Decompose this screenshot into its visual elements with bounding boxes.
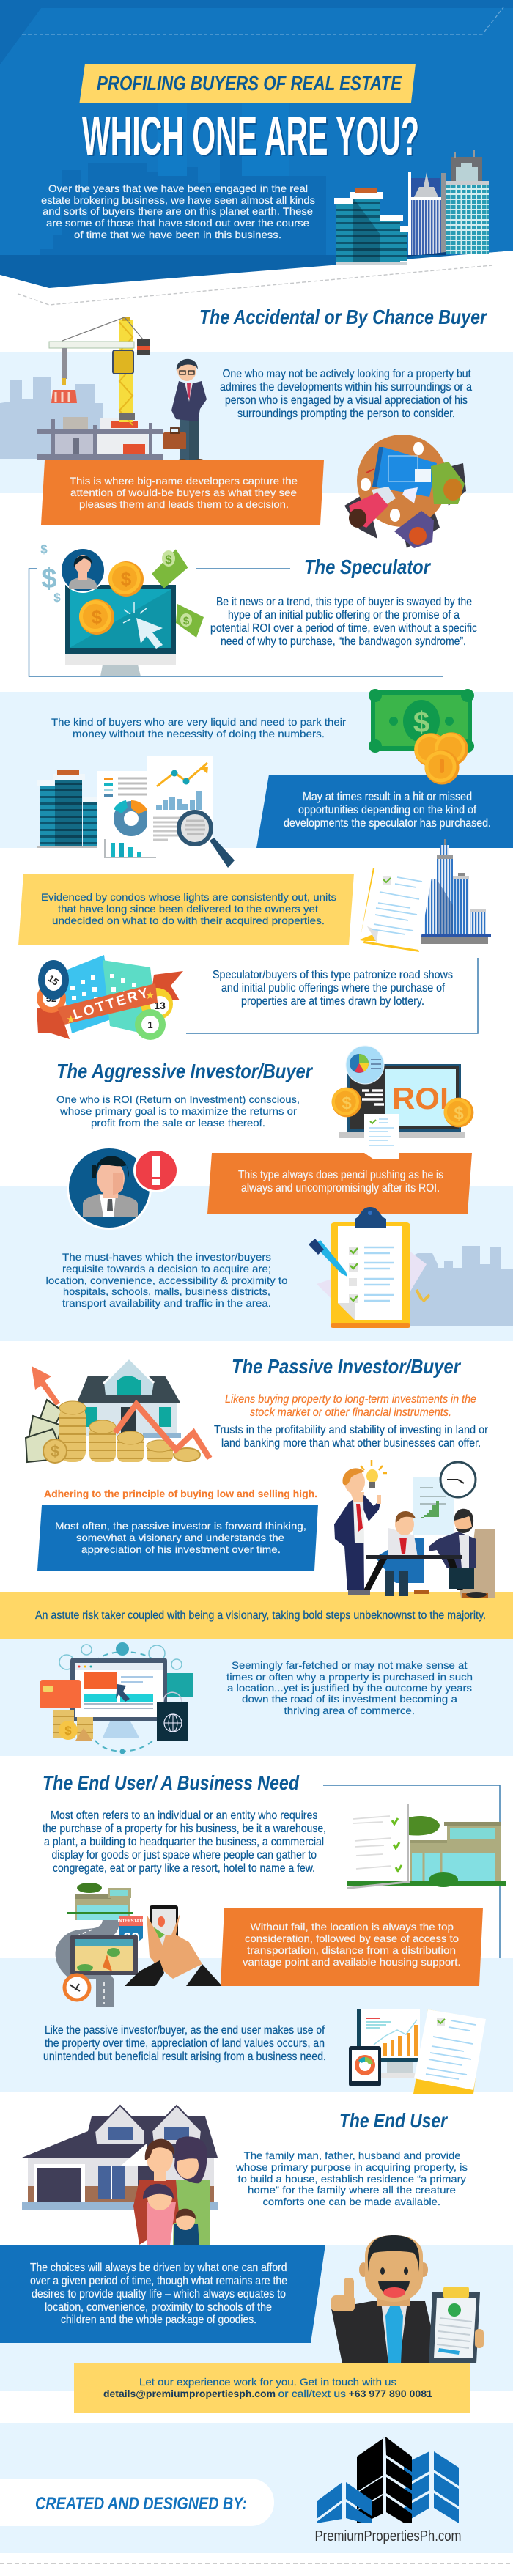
body text: profit from the sale or lease thereof. bbox=[91, 1117, 265, 1129]
illustration: map, road and phone: INTERSTATE bbox=[118, 1919, 144, 1924]
orange highlight text: Likens buying property to long-term investments in the bbox=[225, 1393, 476, 1406]
illustration: ROI laptop: $ bbox=[454, 1104, 464, 1123]
intro text: Over the years that we have been engaged in the real bbox=[48, 182, 308, 194]
body text: One who is ROI (Return on Investment) conscious, bbox=[56, 1093, 300, 1105]
intro text: are some of those that have stood out over the course bbox=[46, 217, 309, 229]
text: far-fetched: down the road of its investment becoming a bbox=[242, 1693, 457, 1705]
section: passive investor bbox=[0, 1355, 513, 1756]
body text bbox=[235, 2149, 468, 2207]
illustration: e-commerce: $ bbox=[64, 1724, 72, 1738]
header panel bbox=[0, 0, 513, 288]
text: like the passive investor: unintended but beneficial result arising from a business need. bbox=[43, 2051, 326, 2063]
logo bbox=[315, 2437, 462, 2544]
text: liquid buyers bbox=[51, 716, 346, 739]
section: end user business need bbox=[0, 1771, 513, 2094]
text: like the passive investor: the property over time, appreciation of land values occurs, an bbox=[45, 2037, 325, 2050]
orange callout: Without fail, the location is always the top bbox=[251, 1921, 454, 1933]
band bbox=[0, 2245, 513, 2391]
orange callout bbox=[41, 460, 324, 525]
contact box: or call/text us bbox=[278, 2388, 346, 2399]
blue callout bbox=[0, 2245, 325, 2343]
title banner bbox=[79, 64, 416, 103]
blue callout: children and the whole package of goodies. bbox=[61, 2314, 256, 2326]
dashed road line bbox=[16, 265, 492, 305]
illustration: monitor tablet and document bbox=[349, 2009, 486, 2094]
illustration: lottery tickets: 52 bbox=[46, 993, 56, 1004]
dashed footer line bbox=[0, 2563, 513, 2564]
body text bbox=[214, 1424, 489, 1450]
intro text: and sorts of buyers there are on this planet earth. These bbox=[43, 205, 313, 217]
contact box: +63 977 890 0081 bbox=[349, 2388, 432, 2399]
orange highlight text bbox=[225, 1393, 476, 1419]
text: far-fetched: thriving area of commerce. bbox=[284, 1705, 415, 1716]
logo: PremiumPropertiesPh.com bbox=[315, 2528, 462, 2544]
body text: whose primary purpose in acquiring property, is bbox=[235, 2161, 468, 2173]
intro text: estate brokering business, we have seen almost all kinds bbox=[41, 194, 315, 206]
heading: The Passive Investor/Buyer bbox=[232, 1355, 462, 1378]
body text: congregate, eat or party like a resort, hotel to name a few. bbox=[53, 1862, 315, 1875]
illustration: skyscraper and contract bbox=[360, 839, 491, 952]
blue callout: May at times result in a hit or missed bbox=[303, 791, 472, 803]
blue callout: location, convenience, proximity to schools of the bbox=[45, 2301, 272, 2314]
section: accidental buyer bbox=[0, 306, 513, 548]
body text bbox=[210, 596, 477, 648]
illustration: lottery tickets: 1 bbox=[147, 1019, 153, 1030]
illustration: monitor with coins and cursor bbox=[40, 542, 204, 676]
illustration: ROI laptop bbox=[332, 1046, 473, 1159]
illustration: monitor with coins and cursor: $ bbox=[165, 553, 172, 567]
illustration: e-commerce bbox=[40, 1642, 193, 1754]
section: the end user bbox=[0, 2106, 513, 2413]
illustration: towers and charts with magnifier bbox=[37, 756, 235, 868]
text: road shows: properties are at times drawn by lottery. bbox=[241, 995, 424, 1008]
yellow callout: undecided on what to do with their acquired properties. bbox=[52, 915, 325, 926]
body text: potential ROI over a period of time, even without a specific bbox=[210, 622, 477, 635]
body text: need of why to purchase, “the bandwagon syndrome”. bbox=[221, 635, 466, 648]
illustration: monitor with coins and cursor: $ bbox=[183, 615, 190, 627]
blue callout: developments the speculator has purchased. bbox=[284, 817, 491, 830]
body text: to build a house, establish residence “a primary bbox=[237, 2173, 466, 2185]
text: must-haves bbox=[45, 1251, 288, 1309]
illustration: lottery tickets: ★ bbox=[66, 1014, 75, 1026]
heading: The End User bbox=[339, 2109, 449, 2132]
illustration: banknote and coins bbox=[369, 689, 474, 785]
orange callout: This type always does pencil pushing as he is bbox=[238, 1169, 443, 1181]
band bbox=[0, 1592, 513, 1639]
illustration: lottery tickets bbox=[37, 955, 183, 1040]
footer panel bbox=[0, 2423, 513, 2553]
illustration: business meeting bbox=[334, 1460, 495, 1598]
blue callout: desires to provide quality life – which always equates to bbox=[32, 2288, 286, 2300]
illustration: monitor with coins and cursor: $ bbox=[53, 591, 61, 605]
text: far-fetched bbox=[226, 1659, 473, 1716]
illustration: ROI laptop: $ bbox=[342, 1093, 352, 1113]
heading: The End User/ A Business Need bbox=[43, 1771, 300, 1794]
body text: admires the developments within his surroundings or a bbox=[220, 381, 472, 394]
orange callout: pleases them and leads them to a decision. bbox=[79, 498, 289, 510]
body text: land banking more than what other businesses can offer. bbox=[221, 1437, 481, 1450]
blue callout: Most often, the passive investor is forward thinking, bbox=[55, 1520, 306, 1532]
heading: The Aggressive Investor/Buyer bbox=[56, 1060, 314, 1082]
orange callout: consideration, followed by ease of access to bbox=[245, 1933, 459, 1944]
icon: investor avatar with alert bbox=[67, 1146, 179, 1230]
illustration: house coins and falling arrow: $ bbox=[51, 1442, 59, 1461]
yellow callout: that have long since been delivered to the owners yet bbox=[58, 903, 318, 915]
body text: the purchase of a property for his business, be it a warehouse, bbox=[43, 1823, 326, 1835]
body text: Trusts in the profitability and stability of investing in land or bbox=[214, 1424, 489, 1436]
text: far-fetched: a location...yet is justified by the outcome by years bbox=[227, 1682, 472, 1694]
illustration: map, road and phone bbox=[56, 1883, 222, 2007]
illustration: ROI laptop: ROI bbox=[392, 1081, 449, 1115]
body text: whose primary goal is to maximize the returns or bbox=[59, 1105, 297, 1117]
blue callout: over a given period of time, though what remains are the bbox=[30, 2275, 287, 2287]
yellow callout bbox=[18, 874, 354, 945]
band bbox=[0, 1186, 513, 1341]
blue callout bbox=[256, 775, 513, 848]
text: liquid buyers: The kind of buyers who are very liquid and need to park their bbox=[51, 716, 346, 728]
illustration: construction site and crane bbox=[0, 317, 163, 460]
frame line bbox=[186, 958, 478, 1033]
body text: home” for the family where all the creature bbox=[248, 2184, 456, 2196]
blue callout: The choices will always be driven by what one can afford bbox=[30, 2262, 287, 2274]
illustration: monitor with coins and cursor: $ bbox=[41, 564, 57, 594]
body text: The family man, father, husband and provide bbox=[244, 2149, 461, 2161]
blue callout: appreciation of his investment over time. bbox=[81, 1543, 281, 1555]
blue callout: somewhat a visionary and understands the bbox=[76, 1532, 284, 1543]
orange callout: always and uncompromisingly after its ROI. bbox=[241, 1182, 440, 1195]
blue callout bbox=[37, 1505, 318, 1571]
illustration: banknote and coins: $ bbox=[413, 706, 429, 739]
contact box: Let our experience work for you. Get in touch with us bbox=[139, 2376, 396, 2388]
band bbox=[0, 1958, 513, 2092]
blue callout: opportunities depending on the kind of bbox=[298, 804, 476, 816]
text: road shows: Speculator/buyers of this type patronize road shows bbox=[213, 969, 453, 981]
orange callout: vantage point and available housing support. bbox=[243, 1956, 461, 1968]
heading: The Speculator bbox=[304, 556, 432, 578]
illustration: commercial building and checklist bbox=[347, 1804, 506, 1889]
text: liquid buyers: money without the necessity of doing the numbers. bbox=[73, 728, 325, 739]
credit pill bbox=[0, 2479, 274, 2526]
body text: Be it news or a trend, this type of buyer is swayed by the bbox=[216, 596, 472, 608]
body text: surroundings prompting the person to consider. bbox=[237, 407, 455, 420]
body text: Most often refers to an individual or an entity who requires bbox=[51, 1809, 318, 1822]
body text: a plant, a building to headquarter the business, a commercial bbox=[44, 1836, 324, 1848]
illustration: checklist clipboard with city bbox=[309, 1207, 513, 1328]
body text: comforts one can be made available. bbox=[262, 2196, 440, 2207]
credit pill: CREATED AND DESIGNED BY: bbox=[35, 2494, 247, 2514]
heading rule bbox=[196, 568, 290, 569]
section: the speculator bbox=[0, 542, 513, 1040]
illustration: agent with clipboard bbox=[331, 2235, 484, 2363]
illustration: house with family bbox=[22, 2106, 218, 2245]
contact box: details@premiumpropertiesph.com bbox=[103, 2388, 276, 2399]
text: like the passive investor: Like the passive investor/buyer, as the end user makes use of bbox=[45, 2024, 325, 2037]
text: must-haves: transport availability and traffic in the area. bbox=[62, 1297, 271, 1309]
orange callout: This is where big-name developers capture the bbox=[70, 475, 298, 487]
body text bbox=[43, 1809, 326, 1875]
text: road shows bbox=[213, 969, 453, 1008]
text: must-haves: location, convenience, accessibility & proximity to bbox=[45, 1274, 288, 1286]
orange subhead: Adhering to the principle of buying low and selling high. bbox=[44, 1488, 317, 1499]
band bbox=[0, 352, 513, 493]
band bbox=[0, 1639, 513, 1756]
text: road shows: and initial public offerings where the purchase of bbox=[221, 982, 445, 994]
illustration: lottery tickets: LOTTERY bbox=[71, 985, 152, 1023]
illustration: lottery tickets: 13 bbox=[154, 1000, 166, 1011]
body text: person who is engaged by a visual appreciation of his bbox=[225, 394, 468, 407]
illustration: monitor with coins and cursor: $ bbox=[121, 568, 132, 590]
illustration: house coins and falling arrow bbox=[26, 1358, 210, 1463]
intro text: of time that we have been in this business. bbox=[74, 229, 281, 240]
body text: hype of an initial public offering or the promise of a bbox=[228, 609, 460, 621]
text: like the passive investor bbox=[43, 2024, 326, 2063]
band bbox=[0, 692, 513, 848]
frame line bbox=[323, 1785, 500, 1958]
illustration: round table meeting bbox=[344, 435, 466, 548]
orange callout: attention of would-be buyers as what they see bbox=[70, 487, 297, 498]
intro text bbox=[41, 182, 315, 240]
section: aggressive investor bbox=[0, 1046, 513, 1341]
illustration: businessman bbox=[163, 359, 207, 463]
body text bbox=[220, 368, 472, 420]
illustration: monitor with coins and cursor: $ bbox=[40, 542, 48, 556]
yellow callout: Evidenced by condos whose lights are consistently out, units bbox=[41, 891, 336, 903]
orange highlight text: stock market or other financial instruments. bbox=[250, 1406, 451, 1419]
contact box bbox=[74, 2363, 470, 2413]
frame line bbox=[29, 569, 443, 676]
text: far-fetched: Seemingly far-fetched or may not make sense at bbox=[232, 1659, 468, 1671]
illustration: lottery tickets: ★ bbox=[145, 989, 155, 1002]
illustration: map, road and phone: 60 bbox=[123, 1930, 139, 1946]
orange callout bbox=[221, 1908, 483, 1986]
text: far-fetched: times or often why a property is purchased in such bbox=[226, 1671, 473, 1683]
text: must-haves: hospitals, schools, malls, business districts, bbox=[63, 1285, 270, 1297]
body text bbox=[56, 1093, 300, 1129]
orange callout: transportation, distance from a distribution bbox=[247, 1944, 456, 1956]
body text: display for goods or just space where people can gather to bbox=[51, 1849, 317, 1861]
illustration: monitor with coins and cursor: $ bbox=[92, 606, 103, 628]
orange callout bbox=[207, 1153, 472, 1214]
body text: One who may not be actively looking for a property but bbox=[223, 368, 471, 380]
illustration: city towers bbox=[334, 150, 489, 265]
title banner: PROFILING BUYERS OF REAL ESTATE bbox=[97, 72, 402, 95]
text: must-haves: requisite towards a decision to acquire are; bbox=[62, 1263, 271, 1274]
text: must-haves: The must-haves which the investor/buyers bbox=[62, 1251, 271, 1263]
illustration: lottery tickets: 15 bbox=[45, 973, 61, 988]
